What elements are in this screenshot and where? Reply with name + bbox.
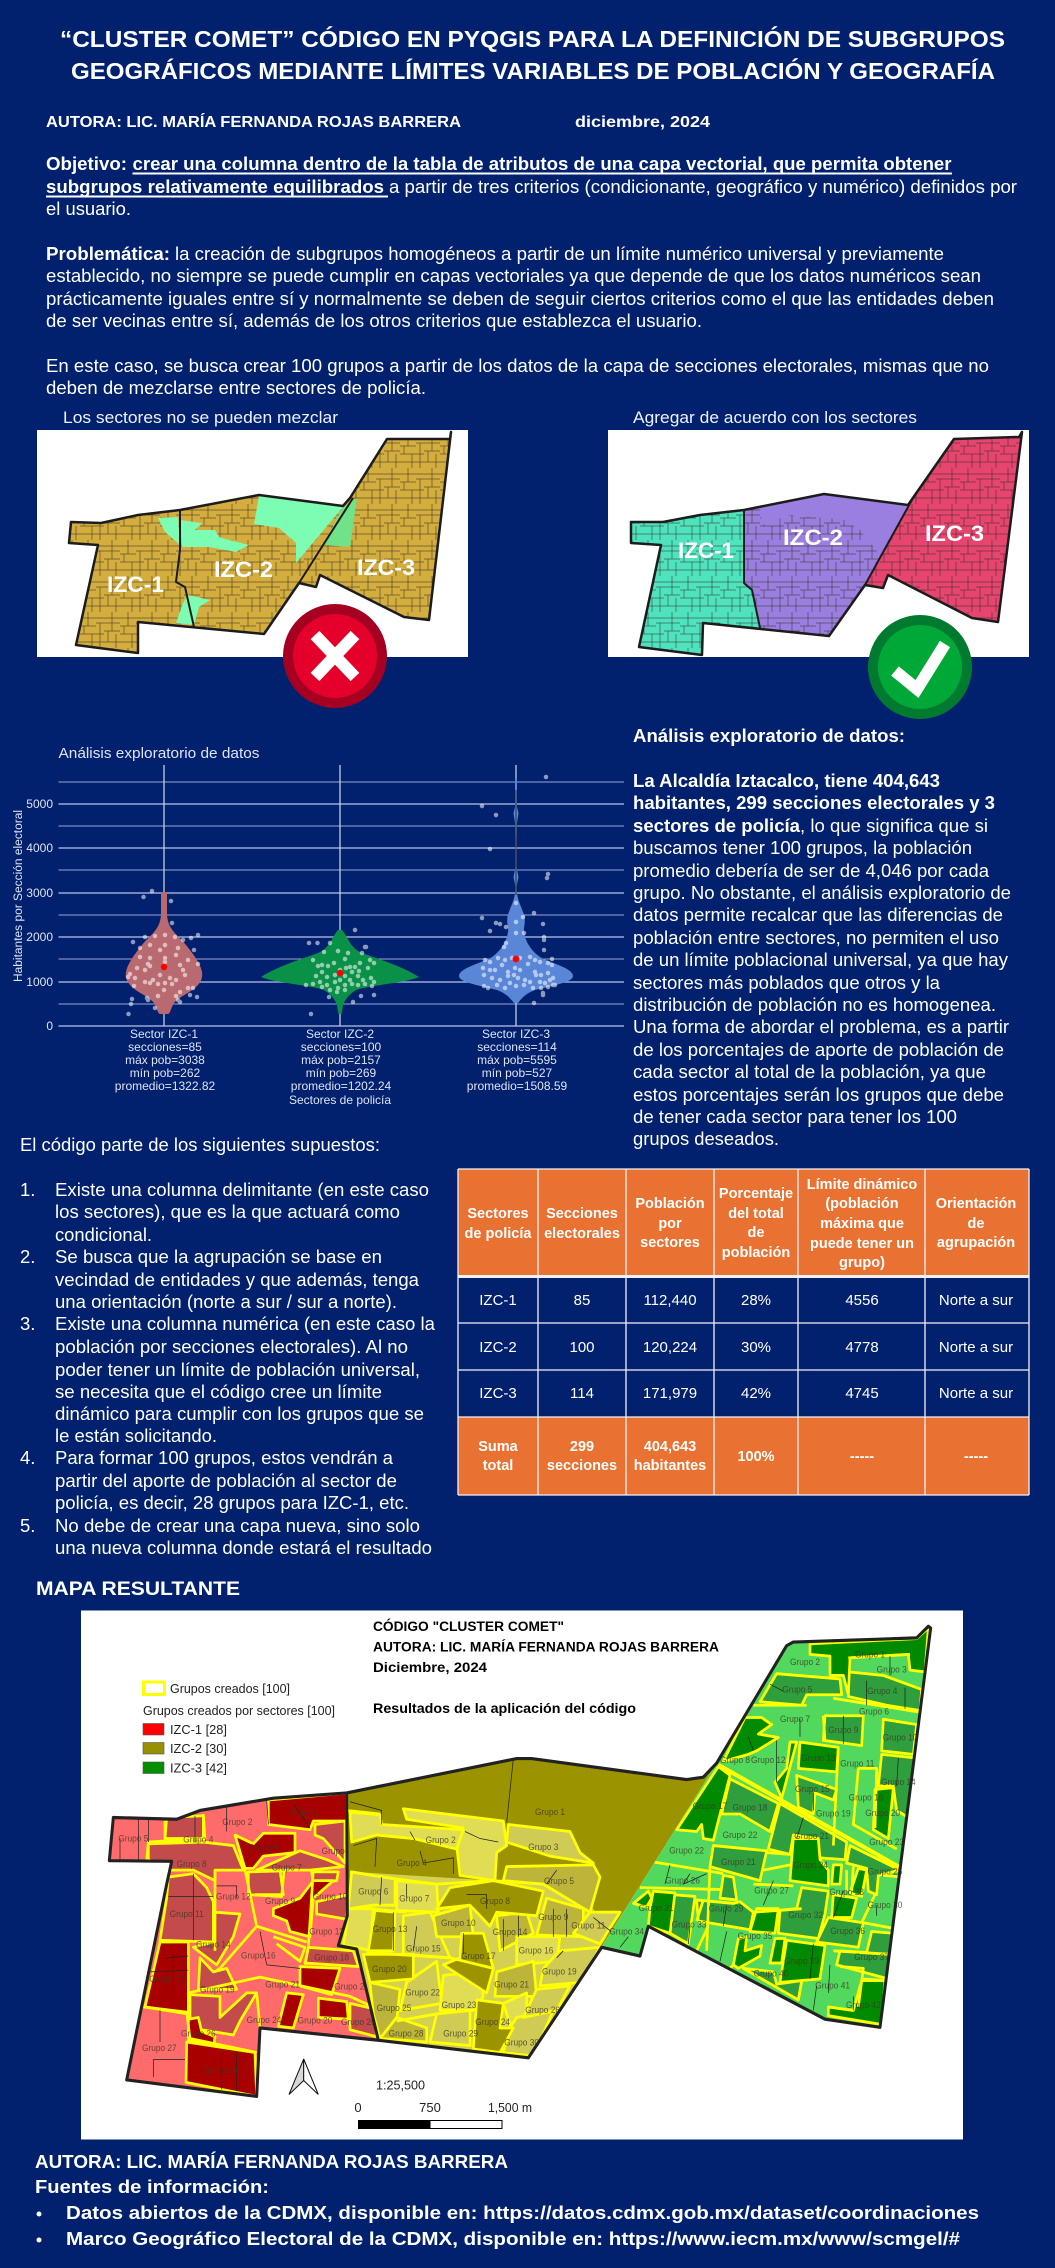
list item 5: una nueva columna donde estará el resultado xyxy=(55,1537,432,1558)
sector IZC-2 labels: Grupo 4 xyxy=(397,1858,427,1868)
sector IZC-2 groups xyxy=(338,1759,713,2058)
text block: objetivo: subgrupos relativamente equilibrados xyxy=(46,176,384,197)
scale bar: 0 xyxy=(354,2100,362,2115)
row IZC-1: 85 xyxy=(574,1292,590,1309)
row IZC-3: IZC-3 xyxy=(479,1385,517,1402)
sector IZC-1 labels: Grupo 13 xyxy=(309,1926,344,1937)
text block: análisis exploratorio: de un límite poblacional universal, ya que hay xyxy=(633,949,1009,970)
row total: secciones xyxy=(547,1458,617,1474)
x axis labels: IZC-1: mín pob=262 xyxy=(130,1066,201,1080)
sector IZC-3 groups and labels: Grupo 16 xyxy=(849,1792,884,1802)
list item 3: dinámico para cumplir con los grupos que se xyxy=(55,1403,424,1424)
scale bar: 750 xyxy=(419,2100,441,2115)
sector IZC-1 labels: Grupo 16 xyxy=(241,1950,276,1961)
row IZC-2: 4778 xyxy=(845,1339,879,1356)
sector IZC-3 groups and labels: Grupo 12 xyxy=(751,1755,786,1765)
panel: result map xyxy=(81,1610,963,2140)
sector IZC-1 labels: Grupo 9 xyxy=(265,1896,295,1906)
icon: north arrow xyxy=(289,2059,318,2094)
sector IZC-3 groups and labels: Grupo 31 xyxy=(639,1903,674,1913)
list item 2: Se busca que la agrupación se base en xyxy=(55,1246,382,1267)
sector IZC-1 labels: Grupo 19 xyxy=(200,1984,235,1995)
x axis labels: IZC-2: mín pob=269 xyxy=(306,1066,377,1080)
table header: electorales xyxy=(544,1226,620,1242)
row IZC-1: 4556 xyxy=(845,1292,879,1309)
panel: sectors grouped map xyxy=(608,430,1029,657)
sector IZC-2 labels: Grupo 3 xyxy=(528,1842,559,1852)
table header: Población xyxy=(635,1196,705,1212)
list item 3: le están solicitando. xyxy=(55,1425,217,1446)
sector IZC-3 groups and labels: Grupo 13 xyxy=(801,1753,836,1763)
list item 1: Existe una columna delimitante (en este caso xyxy=(55,1179,429,1200)
table header: Porcentaje xyxy=(719,1186,793,1202)
label: IZC-1: IZC-1 xyxy=(678,538,734,563)
sector IZC-2 labels: Grupo 29 xyxy=(443,2028,478,2038)
sector IZC-2 labels: Grupo 17 xyxy=(461,1951,496,1961)
violin: IZC-2 xyxy=(261,930,419,1014)
text block: análisis exploratorio: de tener cada sector para tener los 100 xyxy=(633,1106,957,1127)
text block: análisis exploratorio xyxy=(633,725,1011,1149)
row IZC-2: 30% xyxy=(741,1339,771,1356)
list item 3: Existe una columna numérica (en este caso la xyxy=(55,1313,436,1334)
list item 4: partir del aporte de población al sector de xyxy=(55,1470,397,1491)
sector IZC-3 groups and labels: Grupo 14 xyxy=(881,1777,916,1787)
sector IZC-3 groups and labels: Grupo 34 xyxy=(609,1926,644,1936)
map legend: Grupos creados [100] xyxy=(170,1682,290,1696)
x axis labels: IZC-2: Sector IZC-2 xyxy=(306,1027,374,1041)
sector IZC-3 groups and labels: Grupo 27 xyxy=(754,1885,789,1896)
sector IZC-3 groups and labels: Grupo 26 xyxy=(665,1875,700,1885)
text block: en este caso xyxy=(46,355,989,398)
sector IZC-1 groups xyxy=(109,1793,378,2096)
sector IZC-1 labels: Grupo 20 xyxy=(298,2015,333,2025)
text block: análisis exploratorio: de los porcentajes de aporte de población de xyxy=(633,1039,1004,1060)
row total: ----- xyxy=(850,1449,874,1465)
sector IZC-3 groups and labels: Grupo 37 xyxy=(854,1952,889,1962)
sector IZC-3 groups and labels: Grupo 2 xyxy=(790,1657,820,1667)
x axis labels: IZC-3: mín pob=527 xyxy=(482,1066,553,1080)
title: “CLUSTER COMET” CÓDIGO EN PYQGIS PARA LA DEFINICIÓN DE SUBGRUPOS xyxy=(60,25,1005,52)
text block: objetivo: Objetivo: xyxy=(46,153,127,174)
map title block: Diciembre, 2024 xyxy=(373,1660,488,1675)
table header xyxy=(465,1177,1016,1271)
table header: de policía xyxy=(465,1226,532,1242)
x axis labels: IZC-2: Sectores de policía xyxy=(289,1093,391,1107)
table header: agrupación xyxy=(937,1235,1015,1251)
row IZC-3: 114 xyxy=(570,1385,594,1402)
sector IZC-3 groups and labels: Grupo 20 xyxy=(865,1808,900,1818)
map title block: CÓDIGO "CLUSTER COMET" xyxy=(373,1619,564,1634)
map title block xyxy=(373,1619,719,1716)
violin: IZC-3 xyxy=(459,777,573,1003)
y axis title: Habitantes por Sección electoral xyxy=(13,810,25,982)
sector IZC-3 groups and labels: Grupo 41 xyxy=(815,1980,850,1991)
footer: credits and sources: AUTORA: LIC. MARÍA FERNANDA ROJAS BARRERA xyxy=(35,2151,508,2172)
list item 4: policía, es decir, 28 grupos para IZC-1, etc. xyxy=(55,1492,409,1513)
text block: objetivo: crear una columna dentro de la tabla de atributos de una capa vectorial, que permita obtener xyxy=(132,153,952,174)
sector IZC-2 labels: Grupo 2 xyxy=(426,1835,456,1845)
text block: análisis exploratorio: , lo que significa que si xyxy=(800,815,988,836)
sector IZC-3 groups and labels: Grupo 1 xyxy=(855,1649,885,1660)
table header: Secciones xyxy=(546,1206,618,1222)
text block: análisis exploratorio: sectores más poblados que otros y la xyxy=(633,972,941,993)
x axis labels: IZC-3 xyxy=(467,1027,568,1093)
list item 1: condicional. xyxy=(55,1224,152,1245)
sector IZC-3 groups and labels: Grupo 7 xyxy=(780,1714,810,1724)
sector IZC-1 labels: Grupo 14 xyxy=(196,1939,231,1950)
label: IZC-2: IZC-2 xyxy=(783,525,843,550)
sector IZC-2 labels: Grupo 25 xyxy=(377,2003,412,2013)
map outline xyxy=(109,1626,931,2096)
sector IZC-2 labels: Grupo 22 xyxy=(405,1987,440,1997)
sector IZC-3 groups and labels: Grupo 23 xyxy=(869,1837,904,1847)
sector IZC-2 labels: Grupo 1 xyxy=(535,1807,565,1817)
sector IZC-2 labels: Grupo 23 xyxy=(442,2000,477,2010)
sector IZC-3 groups and labels: Grupo 36 xyxy=(830,1926,865,1936)
chart title: Análisis exploratorio de datos xyxy=(58,746,260,762)
icon: red cross badge xyxy=(283,604,387,708)
footer: credits and sources: Datos abiertos de la CDMX, disponible en: https://datos.cdmx.gob.mx/dataset/coordinaciones xyxy=(66,2202,979,2223)
text block: análisis exploratorio: cada sector al total de la población, ya que xyxy=(633,1061,986,1082)
sector IZC-1 labels: Grupo 1 xyxy=(290,1807,320,1817)
sector IZC-2 labels: Grupo 11 xyxy=(571,1920,606,1931)
sector IZC-3 groups and labels: Grupo 21 xyxy=(721,1857,756,1867)
y axis labels: 2000 xyxy=(26,930,53,944)
row total: ----- xyxy=(964,1449,988,1465)
sector IZC-2 labels xyxy=(358,1807,606,2048)
row total: total xyxy=(483,1458,513,1474)
table header: población xyxy=(722,1245,790,1261)
sector IZC-3 groups and labels: Grupo 9 xyxy=(828,1725,859,1735)
list item 4: 4. xyxy=(20,1447,35,1468)
row IZC-3: 42% xyxy=(741,1385,771,1402)
table header: puede tener un xyxy=(810,1236,914,1252)
map legend: IZC-3 [42] xyxy=(170,1762,227,1776)
author and date: AUTORA: LIC. MARÍA FERNANDA ROJAS BARRERA xyxy=(46,112,461,131)
sector IZC-3 groups and labels: Grupo 30 xyxy=(868,1900,903,1910)
text block: análisis exploratorio: sectores de policía xyxy=(633,815,801,836)
text block: análisis exploratorio: La Alcaldía Iztacalco, tiene 404,643 xyxy=(633,770,940,791)
sector IZC-3 groups and labels: Grupo 15 xyxy=(795,1784,830,1794)
row IZC-2 xyxy=(479,1339,1013,1356)
text block: análisis exploratorio: grupo. No obstante, el análisis exploratorio de xyxy=(633,882,1011,903)
sector IZC-2 labels: Grupo 6 xyxy=(358,1886,389,1896)
sector IZC-1 labels: Grupo 6 xyxy=(248,1842,279,1853)
row IZC-3: 4745 xyxy=(845,1385,879,1402)
sector IZC-2 labels: Grupo 15 xyxy=(406,1943,441,1954)
sector IZC-1 labels: Grupo 18 xyxy=(314,1952,349,1962)
text block: análisis exploratorio: distribución de población no es homogenea. xyxy=(633,994,996,1015)
text block: análisis exploratorio: datos permite recalcar que las diferencias de xyxy=(633,904,1003,925)
row IZC-3 xyxy=(479,1385,1013,1402)
chart: violin plot xyxy=(13,746,624,1107)
list item 5: 5. xyxy=(20,1515,35,1536)
row total xyxy=(478,1439,988,1474)
row IZC-1 xyxy=(479,1292,1013,1309)
panel caption: correct: Agregar de acuerdo con los sectores xyxy=(633,408,917,427)
list item 1: los sectores), que es la que actuará como xyxy=(55,1201,400,1222)
text block: análisis exploratorio: habitantes, 299 secciones electorales y 3 xyxy=(633,792,995,813)
sector IZC-3 groups and labels: Grupo 8 xyxy=(720,1755,750,1765)
table header: de xyxy=(968,1216,984,1232)
sector IZC-2 labels: Grupo 16 xyxy=(519,1945,554,1956)
footer: credits and sources: Marco Geográfico Electoral de la CDMX, disponible en: https://www.iecm.mx/www/scmgel/# xyxy=(66,2228,960,2249)
sector IZC-1 labels: Grupo 5 xyxy=(118,1833,149,1844)
table header: grupo) xyxy=(839,1255,885,1271)
sector IZC-1 labels: Grupo 4 xyxy=(183,1834,214,1844)
list item 4 xyxy=(20,1447,409,1513)
sector IZC-3 groups and labels: Grupo 24 xyxy=(793,1860,828,1870)
text block: problemática: la creación de subgrupos homogéneos a partir de un límite numérico universal y previamente xyxy=(175,243,944,264)
label: IZC-1: IZC-1 xyxy=(107,572,164,597)
text block: análisis exploratorio: estos porcentajes serán los grupos que debe xyxy=(633,1084,1004,1105)
sector IZC-2 labels: Grupo 26 xyxy=(525,2005,560,2015)
list item 2: 2. xyxy=(20,1246,35,1267)
sector IZC-1 labels: Grupo 28 xyxy=(203,2065,238,2075)
x axis labels: IZC-1 xyxy=(115,1027,216,1093)
sector IZC-1 labels: Grupo 11 xyxy=(170,1909,204,1919)
sector IZC-3 groups and labels: Grupo 40 xyxy=(754,1969,789,1979)
row IZC-3: Norte a sur xyxy=(939,1385,1013,1402)
scale bar: 1,500 m xyxy=(488,2100,532,2115)
sector IZC-2 labels: Grupo 20 xyxy=(372,1964,407,1974)
text block: en este caso: deben de mezclarse entre sectores de policía. xyxy=(46,377,426,398)
sector IZC-3 groups and labels: Grupo 4 xyxy=(867,1686,898,1696)
table header: de xyxy=(748,1225,764,1241)
text block: análisis exploratorio: Análisis exploratorio de datos: xyxy=(633,725,905,746)
x axis labels: IZC-2 xyxy=(289,1027,392,1107)
y axis labels: 4000 xyxy=(26,841,53,855)
map legend: Grupos creados por sectores [100] xyxy=(143,1704,335,1718)
row total: 100% xyxy=(737,1449,775,1465)
list item 1: 1. xyxy=(20,1179,35,1200)
table header: Orientación xyxy=(936,1196,1016,1212)
table header: máxima que xyxy=(820,1216,904,1232)
sector IZC-1 labels: Grupo 3 xyxy=(322,1846,352,1856)
sector IZC-3 groups and labels: Grupo 19 xyxy=(816,1808,851,1818)
sector IZC-2 labels: Grupo 24 xyxy=(475,2017,510,2027)
sector IZC-2 labels: Grupo 28 xyxy=(389,2028,424,2038)
x axis labels: IZC-2: secciones=100 xyxy=(301,1040,382,1054)
panel caption: incorrect: Los sectores no se pueden mezclar xyxy=(63,408,338,427)
sector IZC-2 labels: Grupo 13 xyxy=(373,1924,408,1934)
map legend: IZC-2 [30] xyxy=(170,1742,227,1756)
table header: por xyxy=(658,1216,682,1232)
sector IZC-2 labels: Grupo 10 xyxy=(441,1918,476,1928)
sector IZC-3 groups and labels: Grupo 33 xyxy=(672,1919,707,1929)
table header: del total xyxy=(728,1206,784,1222)
sector IZC-1 labels: Grupo 26 xyxy=(181,2028,216,2038)
sector IZC-3 groups and labels: Grupo 11 xyxy=(840,1758,875,1769)
icon: green check badge xyxy=(868,615,972,719)
text block: objetivo xyxy=(46,153,1017,219)
sector IZC-3 groups and labels: Grupo 32 xyxy=(788,1910,823,1920)
sector IZC-3 groups and labels: Grupo 25 xyxy=(868,1866,903,1877)
y axis labels: 5000 xyxy=(26,797,53,811)
list item 3: 3. xyxy=(20,1313,35,1334)
sector IZC-2 labels: Grupo 30 xyxy=(504,2037,539,2048)
sector IZC-3 groups and labels: Grupo 10 xyxy=(883,1732,918,1742)
x axis labels: IZC-1: secciones=85 xyxy=(128,1040,202,1054)
list item 2 xyxy=(20,1246,420,1312)
sector IZC-1 labels: Grupo 21 xyxy=(265,1979,300,1989)
list item 2: una orientación (norte a sur / sur a norte). xyxy=(55,1291,397,1312)
sector IZC-1 labels: Grupo 10 xyxy=(313,1891,348,1902)
sector IZC-2 labels: Grupo 8 xyxy=(480,1896,510,1906)
y axis labels: 1000 xyxy=(26,975,53,989)
sector IZC-3 groups and labels: Grupo 35 xyxy=(738,1931,773,1941)
author and date: diciembre, 2024 xyxy=(575,114,710,131)
list item 4: Para formar 100 grupos, estos vendrán a xyxy=(55,1447,394,1468)
label: IZC-3: IZC-3 xyxy=(925,521,984,546)
sector IZC-1 labels: Grupo 22 xyxy=(334,1982,369,1992)
label: IZC-3: IZC-3 xyxy=(357,555,415,580)
x axis labels: IZC-2: promedio=1202.24 xyxy=(291,1079,392,1093)
sector IZC-3 groups and labels: Grupo 22 xyxy=(723,1830,758,1840)
list item 3: se necesita que el código cree un límite xyxy=(55,1381,382,1402)
row total: Suma xyxy=(478,1439,519,1455)
heading: mapa resultante: MAPA RESULTANTE xyxy=(36,1579,240,1600)
list item 3: población por secciones electorales). Al no xyxy=(55,1336,408,1357)
sector IZC-3 groups and labels: Grupo 5 xyxy=(782,1684,813,1695)
row IZC-1: 112,440 xyxy=(643,1292,697,1309)
text block: problemática: de ser vecinas entre sí, además de los otros criterios que establezca el usuario. xyxy=(46,310,702,331)
sector IZC-1 labels: Grupo 7 xyxy=(272,1862,302,1873)
sector IZC-3 groups and labels: Grupo 29 xyxy=(709,1903,744,1914)
table header: Límite dinámico xyxy=(807,1177,917,1193)
sector IZC-3 groups and labels: Grupo 42 xyxy=(846,2000,881,2010)
sector IZC-2 labels: Grupo 7 xyxy=(399,1893,430,1903)
footer: credits and sources: Fuentes de información: xyxy=(35,2176,269,2197)
sector IZC-1 labels: Grupo 2 xyxy=(222,1817,253,1827)
sector IZC-3 groups and labels: Grupo 18 xyxy=(733,1802,768,1813)
sector IZC-1 labels: Grupo 12 xyxy=(216,1891,251,1902)
text block: problemática: establecido, no siempre se puede cumplir en capas vectoriales ya que depende de que los datos numéricos sean xyxy=(46,265,981,286)
scale bar: 1:25,500 xyxy=(376,2078,425,2092)
sector IZC-2 labels: Grupo 14 xyxy=(493,1927,528,1937)
sector IZC-3 groups and labels: Grupo 6 xyxy=(859,1706,889,1716)
table header: Sectores xyxy=(467,1206,529,1222)
sector IZC-1 labels: Grupo 17 xyxy=(149,1974,184,1984)
sector IZC-1 labels: Grupo 24 xyxy=(247,2015,282,2025)
row total: 404,643 xyxy=(644,1439,696,1455)
text block: análisis exploratorio: población entre sectores, no permiten el uso xyxy=(633,927,999,948)
map: sectors and groups xyxy=(109,1626,931,2096)
text block: análisis exploratorio: grupos deseados. xyxy=(633,1128,779,1149)
row IZC-1: Norte a sur xyxy=(939,1292,1013,1309)
text block: supuestos: El código parte de los siguientes supuestos: xyxy=(20,1134,380,1155)
list item 3: poder tener un límite de población universal, xyxy=(55,1359,420,1380)
table header: (población xyxy=(825,1196,899,1212)
label: IZC-2: IZC-2 xyxy=(214,557,273,582)
map legend xyxy=(143,1682,335,1776)
text block: problemática: prácticamente iguales entre sí y normalmente se deben de seguir ciertos criterios como el que las entidades deben xyxy=(46,288,994,309)
text block: en este caso: En este caso, se busca crear 100 grupos a partir de los datos de la capa de secciones electorales, mismas que no xyxy=(46,355,989,376)
sector IZC-2 labels: Grupo 19 xyxy=(542,1966,577,1976)
sector IZC-2 labels: Grupo 5 xyxy=(544,1876,574,1886)
text block: análisis exploratorio: Una forma de abordar el problema, es a partir xyxy=(633,1016,1009,1037)
sector IZC-1 labels xyxy=(118,1807,376,2075)
y axis labels xyxy=(26,797,53,1033)
text block: análisis exploratorio: buscamos tener 100 grupos, la población xyxy=(633,837,972,858)
x axis labels: IZC-3: secciones=114 xyxy=(477,1040,557,1054)
title xyxy=(60,25,1005,84)
list item 1 xyxy=(20,1179,429,1245)
row total: 299 xyxy=(570,1439,594,1455)
x axis labels: IZC-1: promedio=1322.82 xyxy=(115,1079,216,1093)
x axis labels: IZC-1: máx pob=3038 xyxy=(125,1053,205,1067)
sector IZC-3 groups and labels: Grupo 22 xyxy=(669,1845,704,1856)
sector IZC-1 labels: Grupo 27 xyxy=(142,2043,177,2053)
text block: objetivo: a partir de tres criterios (condicionante, geográfico y numérico) definidos por xyxy=(389,176,1017,197)
row total: habitantes xyxy=(634,1458,706,1474)
sector IZC-3 groups and labels: Grupo 21 xyxy=(794,1831,829,1841)
title: GEOGRÁFICOS MEDIANTE LÍMITES VARIABLES DE POBLACIÓN Y GEOGRAFÍA xyxy=(71,57,995,84)
row IZC-1: IZC-1 xyxy=(479,1292,517,1309)
scale bar xyxy=(354,2078,532,2129)
table: sectores xyxy=(458,1169,1029,1495)
x axis labels: IZC-3: máx pob=5595 xyxy=(477,1053,557,1067)
map title block: AUTORA: LIC. MARÍA FERNANDA ROJAS BARRERA xyxy=(373,1640,719,1654)
text block: análisis exploratorio: promedio debería de ser de 4,046 por cada xyxy=(633,860,990,881)
author and date xyxy=(46,112,710,131)
list item 3 xyxy=(20,1313,436,1446)
text block: objetivo: el usuario. xyxy=(46,198,131,219)
sector IZC-2 labels: Grupo 9 xyxy=(538,1912,569,1922)
text block: supuestos xyxy=(20,1134,436,1558)
row IZC-2: 120,224 xyxy=(643,1339,697,1356)
panel: sectors mixed map xyxy=(37,430,468,657)
x axis labels: IZC-2: máx pob=2157 xyxy=(301,1053,381,1067)
y axis labels: 3000 xyxy=(26,886,53,900)
row IZC-1: 28% xyxy=(741,1292,771,1309)
sector IZC-3 groups and labels: Grupo 3 xyxy=(877,1664,907,1674)
text block: problemática xyxy=(46,243,994,331)
list item 5: No debe de crear una capa nueva, sino solo xyxy=(55,1515,420,1536)
sector IZC-3 groups and labels xyxy=(602,1626,931,2027)
map legend: IZC-1 [28] xyxy=(170,1723,227,1737)
y axis labels: 0 xyxy=(46,1019,53,1033)
list item 5 xyxy=(20,1515,432,1558)
violin: IZC-1 xyxy=(126,891,202,1014)
row IZC-2: 100 xyxy=(569,1339,595,1356)
text block: problemática: Problemática: xyxy=(46,243,170,264)
sector IZC-3 groups and labels: Grupo 28 xyxy=(829,1887,864,1897)
sector IZC-1 labels: Grupo 25 xyxy=(341,2017,376,2027)
row IZC-3: 171,979 xyxy=(643,1385,697,1402)
x axis labels: IZC-1: Sector IZC-1 xyxy=(130,1027,198,1041)
x axis labels: IZC-3: promedio=1508.59 xyxy=(467,1079,568,1093)
sector IZC-1 labels: Grupo 8 xyxy=(177,1859,207,1869)
footer: credits and sources xyxy=(35,2151,979,2249)
row IZC-2: IZC-2 xyxy=(479,1339,517,1356)
x axis labels: IZC-3: Sector IZC-3 xyxy=(482,1027,550,1041)
sector IZC-3 groups and labels: Grupo 17 xyxy=(693,1801,728,1811)
sector IZC-3 groups and labels: Grupo 39 xyxy=(784,1956,819,1966)
list item 2: vecindad de entidades y que además, tenga xyxy=(55,1269,420,1290)
row IZC-2: Norte a sur xyxy=(939,1339,1013,1356)
sector IZC-2 labels: Grupo 21 xyxy=(494,1979,529,1989)
table header: sectores xyxy=(640,1235,700,1251)
map title block: Resultados de la aplicación del código xyxy=(373,1701,636,1716)
